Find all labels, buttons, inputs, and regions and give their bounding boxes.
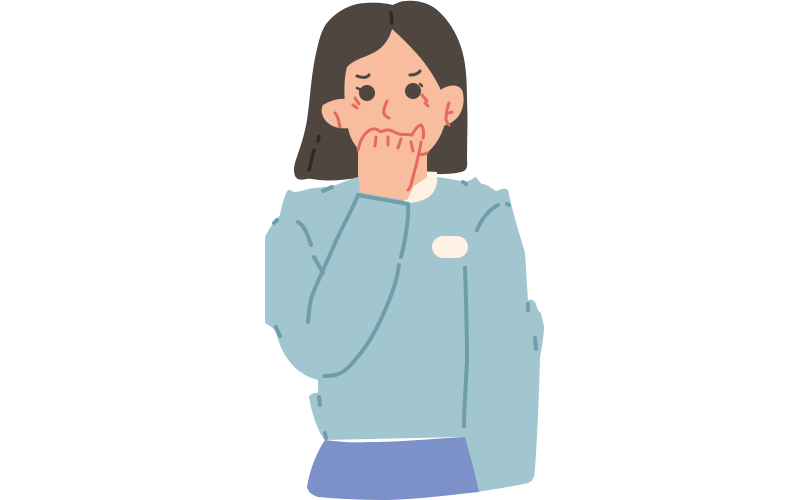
eyebrows [357, 71, 420, 77]
face and neck [344, 29, 445, 192]
hair strands [309, 13, 392, 170]
left ear [322, 99, 350, 128]
hand [358, 126, 424, 200]
hair [294, 1, 467, 180]
name badge [432, 236, 468, 258]
collar [400, 170, 437, 203]
eyes [357, 83, 422, 101]
sweater [265, 170, 544, 492]
red line details: nose, blush, ears, fingers [335, 95, 452, 190]
skirt [307, 437, 479, 500]
sweater line details [274, 182, 536, 438]
right ear [440, 86, 464, 126]
